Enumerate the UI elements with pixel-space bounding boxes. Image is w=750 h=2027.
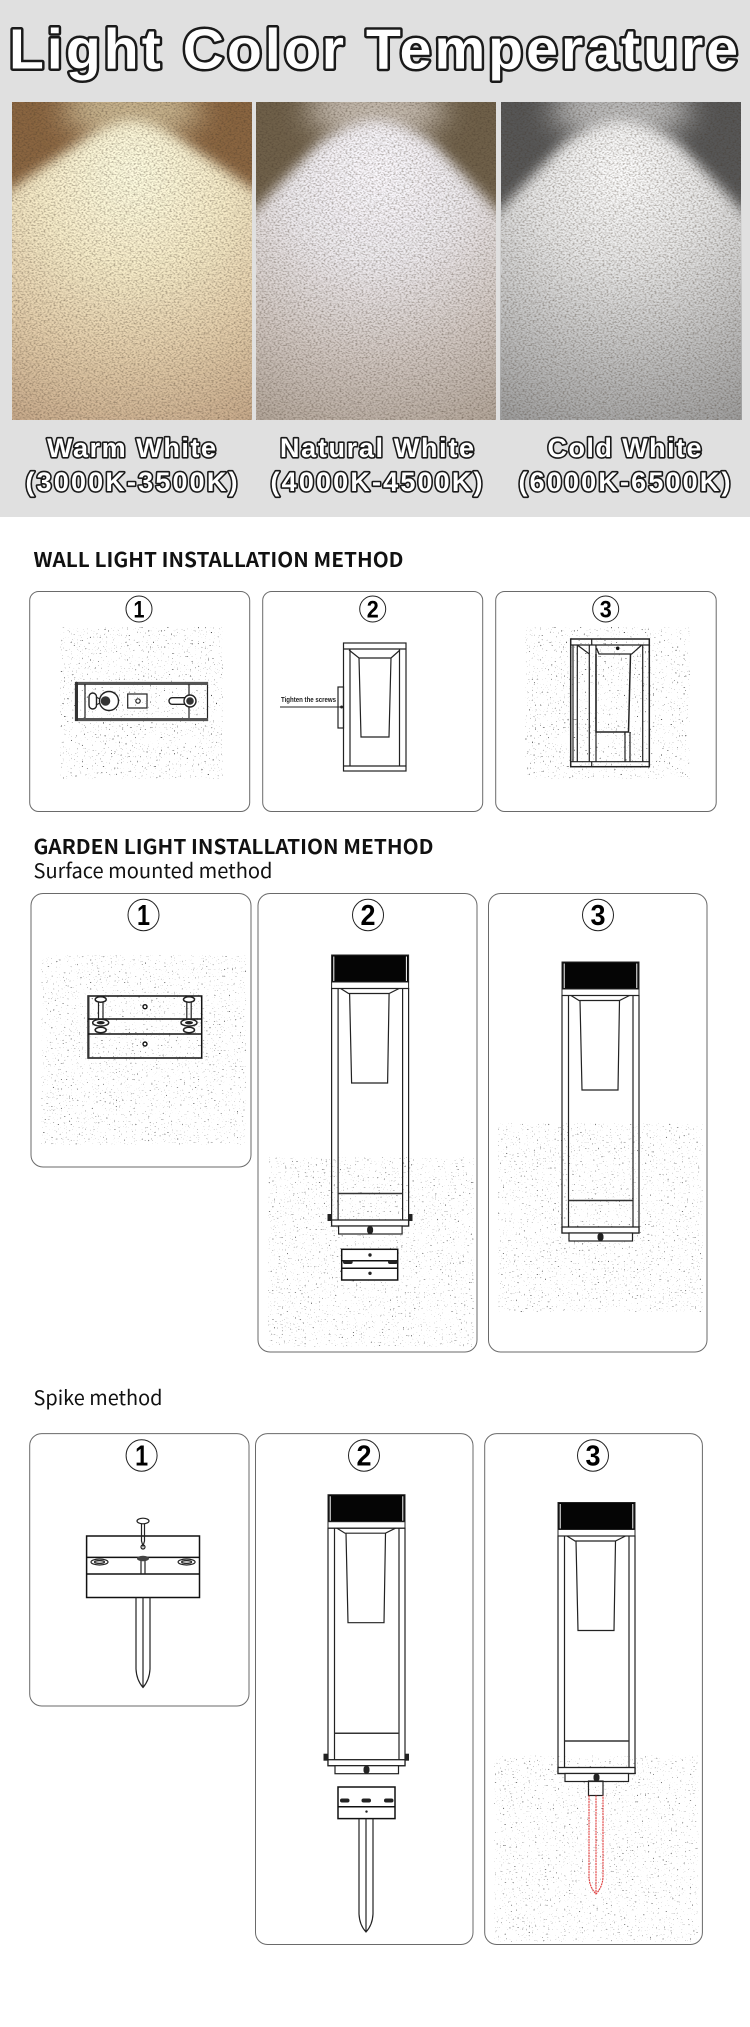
- lamp in ground: [558, 1502, 635, 1782]
- step number 2: 2: [367, 596, 379, 624]
- panel: surface step 3: [488, 894, 707, 1352]
- photo: natural white wall light: [256, 102, 496, 420]
- step number 1: 1: [137, 900, 150, 932]
- sub-heading: surface mounted: Surface mounted method: [34, 855, 272, 884]
- label: warm white: Warm White: [47, 433, 216, 463]
- step number 1: 1: [134, 596, 144, 624]
- step number 3: 3: [600, 596, 612, 624]
- wall lamp side drawing: [338, 643, 406, 771]
- base bracket: [342, 1249, 398, 1280]
- spike base: [338, 1787, 395, 1932]
- lamp mounted: [562, 962, 639, 1241]
- step number 1: [126, 596, 152, 624]
- spike socket: [588, 1781, 603, 1796]
- step number 1: [126, 1440, 157, 1472]
- sub-heading: spike method: Spike method: [34, 1382, 162, 1411]
- wall texture: [525, 627, 690, 779]
- step number 1: [128, 899, 159, 932]
- label: warm white: [26, 433, 238, 497]
- step number 2: 2: [356, 1440, 372, 1472]
- label: natural white: [270, 433, 482, 497]
- ground texture: [498, 1123, 703, 1312]
- lamp with side screws: [324, 1495, 409, 1774]
- heading: garden light installation: GARDEN LIGHT INSTALLATION METHOD: [34, 831, 433, 860]
- step number 1: 1: [135, 1440, 148, 1472]
- ground texture: [268, 1157, 474, 1347]
- step number 3: 3: [586, 1440, 600, 1472]
- wall texture: [60, 627, 223, 779]
- panel: wall step 1: [30, 592, 250, 812]
- label: natural white: (4000K-4500K): [270, 467, 482, 497]
- panel: spike step 2: [256, 1434, 473, 1944]
- lamp with side screws: [328, 955, 412, 1234]
- step number 3: [593, 596, 619, 624]
- photo: cold white wall light: [500, 102, 742, 420]
- icon: wall bracket: [75, 682, 208, 721]
- step number 3: 3: [590, 900, 606, 932]
- step number 3: [578, 1440, 608, 1472]
- panel: surface step 1: [31, 894, 251, 1167]
- wall lamp mounted drawing: [571, 639, 649, 767]
- panel: wall step 3: [496, 592, 716, 812]
- label: warm white: (3000K-3500K): [26, 467, 238, 497]
- panel: spike step 1: [30, 1434, 249, 1706]
- callout: tighten the screws: [280, 695, 343, 708]
- label: natural white: Natural White: [280, 433, 474, 463]
- photo: warm white wall light: [12, 102, 252, 420]
- step number 3: [582, 899, 614, 932]
- icon: mounting bracket with screws: [88, 996, 202, 1058]
- heading: wall light installation: WALL LIGHT INSTALLATION METHOD: [34, 544, 404, 573]
- step number 2: [348, 1440, 380, 1472]
- label: cold white: Cold White: [548, 433, 702, 463]
- callout: tighten the screws: Tighten the screws: [281, 695, 336, 704]
- step number 2: [360, 596, 386, 624]
- ground texture: [41, 955, 246, 1145]
- panel: wall step 2: [263, 592, 483, 812]
- red buried spike: [589, 1796, 603, 1894]
- ground texture: [494, 1756, 698, 1942]
- icon: spike bracket: [87, 1518, 200, 1688]
- step number 2: [352, 899, 384, 932]
- label: cold white: (6000K-6500K): [518, 467, 730, 497]
- panel: surface step 2: [258, 894, 477, 1352]
- panel: spike step 3: [485, 1434, 702, 1944]
- title: Light Color Temperature: [9, 18, 738, 82]
- header band: [0, 0, 750, 517]
- label: cold white: [518, 433, 730, 497]
- step number 2: 2: [360, 900, 376, 932]
